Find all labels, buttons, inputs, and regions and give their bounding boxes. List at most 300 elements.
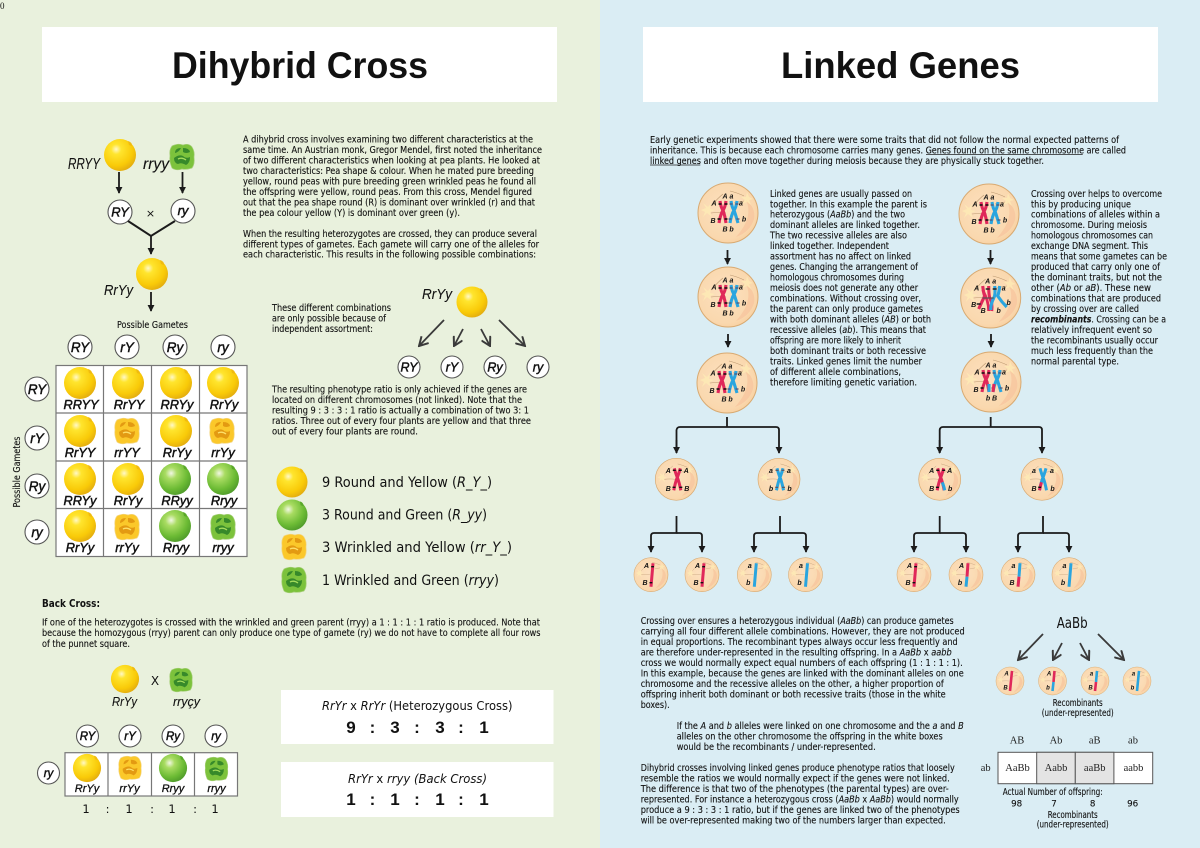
diagram: AaBb gamete production: a [1132, 672, 1136, 678]
diagram: RrYy gamete formation: RrYy [422, 286, 453, 303]
cells: gametes: B [693, 580, 699, 587]
test cross table: aaBb [1084, 763, 1105, 774]
text block: linked genes explanation: assortment has no affect on linked [770, 252, 911, 263]
text block: independent assortment note: are only possible because of [272, 314, 387, 324]
diagram: meiosis without crossing over: b [729, 310, 734, 318]
text block: phenotype ratio explanation: The resulting phenotype ratio is only achieved if the genes are [271, 384, 527, 396]
text block: crossing over explanation: by crossing over are called [1031, 304, 1139, 315]
callout: back cross ratio: 1 [390, 790, 400, 809]
cells: gametes: B [642, 580, 648, 587]
text block: linked genes explanation: dominant alleles are linked together. [770, 220, 920, 231]
text block: linked genes introduction: inheritance. This is because each chromosome carries many genes. Genes found on the same chromosome are called [650, 145, 1126, 156]
legend: phenotype ratio: 3 Wrinkled and Yellow (rr_Y_) [322, 540, 512, 556]
diagram: RrYy gamete formation: ry [533, 360, 544, 374]
text block: crossing over explanation: this by producing unique [1031, 199, 1131, 210]
diagram: meiosis with crossing over: A [973, 286, 979, 292]
text block: linked genes explanation: linked together. Independent [770, 241, 889, 252]
diagram: back cross parents: X [151, 674, 159, 688]
back cross punnett square: rY [124, 731, 137, 743]
diagram: meiosis without crossing over: B [721, 396, 727, 404]
diagram: meiosis without crossing over: a [738, 370, 742, 378]
diagram: meiosis without crossing over: A [720, 364, 727, 370]
diagram: meiosis with crossing over: b [986, 396, 991, 402]
cells: gametes: A [958, 563, 964, 570]
text block: phenotype ratio explanation: out of every four plants are round. [272, 426, 418, 438]
diagram: meiosis without crossing over: a [730, 278, 734, 284]
text block: back cross explanation: of the punnet square. [42, 639, 130, 650]
punnett square: RRyy [161, 493, 194, 508]
diagram: parental cross to F1: rryy [143, 156, 170, 173]
diagram: meiosis without crossing over: a [729, 364, 733, 370]
back cross punnett square: rrYy [119, 783, 141, 795]
back cross punnett square: Ry [166, 731, 181, 743]
text block: crossing over explanation: exchange DNA segment. This [1031, 241, 1148, 252]
text block: dihybrid introduction: out that the pea shape round (R) is dominant over wrinkled (r) and that [243, 197, 535, 208]
text block: dihybrid introduction: different types of gametes. Each gamete will carry one of the alleles for [243, 239, 539, 250]
cells: gametes: a [1063, 563, 1067, 570]
text block: linked genes explanation [769, 189, 931, 388]
title: Linked Genes: Linked Genes [781, 45, 1020, 86]
callout: heterozygous cross ratio: 3 [390, 718, 400, 737]
callout: heterozygous cross ratio: 3 [435, 718, 445, 737]
punnett square: RRYy [64, 493, 98, 508]
back cross punnett square: rryy [207, 783, 227, 795]
punnett square: RrYy [66, 540, 96, 555]
cells: gametes: A [906, 563, 912, 570]
callout: back cross ratio: : [458, 790, 464, 809]
text block: linked genes introduction: linked genes and often move together during meiosis because they are physically stuck together. [650, 156, 1044, 167]
gamete circles: top row: Ry [167, 340, 184, 355]
cells: gametes: A [643, 563, 649, 570]
test cross table: AB [1010, 736, 1024, 747]
text block: linked genes explanation: The two recessive alleles are also [769, 231, 907, 242]
text block: dihybrid introduction: same time. An Austrian monk, Gregor Mendel, first noted the inheritance [243, 145, 542, 156]
text block: allele arrangement note: alleles on the other chromosome the offspring in the white boxes [677, 732, 943, 742]
diagram: meiosis without crossing over: A [721, 194, 728, 200]
ratio under back cross square [82, 802, 219, 816]
cells: secondary division: b [769, 486, 774, 493]
title: Dihybrid Cross [42, 27, 557, 102]
diagram: back cross parents: rryçy [173, 694, 201, 709]
legend: phenotype ratio: 3 Round and Green (R_yy) [322, 508, 487, 524]
text block: linked genes explanation: combinations. Without crossing over, [770, 294, 921, 304]
diagram: meiosis without crossing over: b [741, 386, 746, 394]
diagram: AaBb gamete production: a [1090, 672, 1094, 678]
text block: linked genes explanation: therefore limiting genetic variation. [770, 377, 917, 388]
diagram: meiosis with crossing over [959, 184, 1021, 412]
cells: secondary division: B [929, 486, 934, 493]
cells: secondary division: A [928, 468, 934, 475]
cells: secondary division: A [946, 468, 952, 475]
diagram: parental cross to F1: × [146, 207, 155, 220]
title: Linked Genes [643, 27, 1158, 102]
text block: crossing over explanation: the recombinants usually occur [1031, 335, 1158, 346]
diagram: RrYy gamete formation: Ry [487, 360, 503, 374]
text block: back cross explanation: because the homozygous (rryy) parent can only produce one type of gamete (ry) we do not have to complete all four rows [42, 628, 541, 639]
punnett square: rrYy [211, 445, 236, 460]
text block: linked genes explanation: heterozygous (AaBb) and the two [770, 210, 905, 221]
ratio under back cross square: 1 [125, 802, 133, 816]
cells: gametes: b [746, 580, 751, 587]
text block: phenotype ratio explanation: ratios. Three out of every four plants are yellow and that three [272, 416, 531, 427]
diagram: meiosis without crossing over: B [710, 302, 716, 309]
punnett square: RRYy [161, 397, 195, 412]
text block: crossing over explanation: produced that carry only one of [1031, 262, 1161, 273]
cells: gametes: a [748, 563, 752, 570]
text block: independent assortment note: These different combinations [271, 303, 391, 314]
cells: secondary division: B [666, 486, 671, 493]
callout: back cross ratio: : [370, 790, 375, 809]
text block: phenotype ratio explanation [271, 384, 531, 438]
diagram: RrYy gamete formation: rY [446, 360, 460, 374]
text block: crossing over explanation: means that some gametes can be [1031, 252, 1167, 263]
punnett square: RrYY [114, 397, 146, 412]
diagram: back cross parents [111, 665, 201, 709]
panel: dihybrid cross background [0, 0, 600, 848]
text block: linked genes introduction [650, 135, 1126, 167]
cells: gametes: a [1012, 563, 1016, 570]
back cross punnett square: ry [44, 768, 55, 780]
ratio under back cross square: : [106, 802, 109, 816]
text block: crossing over explanation: chromosome. During meiosis [1031, 220, 1147, 231]
text block: linked genes explanation: homologous chromosomes during [770, 273, 904, 284]
text block: dihybrid introduction: When the resulting heterozygotes are crossed, they can produce several [243, 229, 537, 240]
cells: secondary division: a [787, 468, 791, 475]
label: recombinants under-represented upper [1042, 698, 1114, 719]
text block: crossing over explanation: homologous chromosomes can [1031, 231, 1153, 242]
diagram: meiosis without crossing over: B [722, 226, 728, 234]
diagram: meiosis with crossing over: b [990, 228, 995, 234]
text block: crossing over proportions: chromosome and the recessive alleles on the other, a higher proportion of [641, 679, 944, 690]
callout: back cross ratio: : [414, 790, 420, 809]
diagram: AaBb gamete production: b [1046, 686, 1050, 692]
test cross table: Ab [1050, 736, 1062, 747]
ratio under back cross square: : [193, 802, 197, 816]
heading: Possible Gametes top: Possible Gametes [117, 320, 188, 331]
diagram: parental cross to F1: RrYy [104, 282, 134, 299]
text block: linked dihybrid ratios: represented. For instance a heterozygous cross (AaBb x AaBb) would normally [641, 794, 959, 806]
diagram: meiosis with crossing over: a [1000, 202, 1004, 208]
label: actual number of offspring: Actual Number of offspring: [1003, 787, 1103, 798]
text block: linked dihybrid ratios: The difference is that two of the phenotypes (the parental types) are over- [640, 784, 949, 795]
punnett square: RrYY [65, 445, 97, 460]
diagram: parental cross to F1: ry [178, 203, 190, 218]
gamete circles: left column [25, 377, 49, 544]
diagram: meiosis without crossing over: a [730, 194, 734, 200]
text block: linked genes explanation: of different allele combinations, [770, 367, 901, 378]
cells: secondary division: a [1050, 468, 1054, 475]
text block: linked dihybrid ratios: resemble the ratios we would normally expect if the genes were not linked. [641, 774, 950, 784]
callout: back cross ratio: RrYr x rryy (Back Cross) [348, 771, 487, 786]
gamete circles: top row: rY [120, 340, 135, 355]
cells: secondary division: B [1031, 486, 1037, 493]
text block: dihybrid introduction: the pea colour yellow (Y) is dominant over green (y). [243, 208, 460, 219]
text block: crossing over proportions: In this example, because the genes are linked with the dominant alleles on one [641, 668, 964, 679]
punnett square: RRYY [63, 397, 100, 412]
text block: linked dihybrid ratios: Dihybrid crosses involving linked genes produce phenotype ratios that loosely [641, 763, 955, 774]
label: actual number of offspring: 8 [1090, 800, 1095, 810]
back cross punnett square: RY [80, 731, 97, 743]
cells: gametes: B [1009, 580, 1015, 587]
diagram: meiosis with crossing over: b [1007, 300, 1012, 307]
diagram: meiosis with crossing over: A [982, 194, 989, 202]
callout: heterozygous cross ratio: : [414, 718, 420, 737]
diagram: meiosis with crossing over: A [971, 202, 978, 208]
label: recombinants under-represented lower: Recombinants [1048, 810, 1098, 821]
ratio under back cross square: 1 [211, 802, 219, 816]
text block: linked genes explanation: both dominant traits or both recessive [770, 346, 926, 357]
cells: secondary division: B [684, 486, 689, 493]
diagram: meiosis with crossing over: B [973, 387, 979, 394]
diagram: meiosis without crossing over: A [721, 278, 728, 284]
text block: crossing over explanation: recombinants. Crossing can be a [1031, 314, 1166, 325]
text block: crossing over proportions: in equal proportions. The recombinant types always occur less frequently and [641, 637, 958, 648]
diagram: AaBb gamete production: B [1003, 686, 1008, 692]
diagram: parental cross to F1 [68, 139, 195, 311]
cells: gametes: b [1061, 580, 1066, 587]
heading: Back Cross: Back Cross: [42, 598, 100, 610]
back cross punnett square: ry [211, 731, 222, 743]
diagram: meiosis without crossing over: B [710, 218, 716, 225]
diagram: meiosis without crossing over: A [710, 284, 717, 292]
cells: secondary division: A [683, 468, 689, 475]
text block: dihybrid introduction: each characteristic. This results in the following possible combinations: [243, 250, 536, 261]
cells: secondary division: a [769, 468, 773, 475]
diagram: AaBb gamete production: AaBb [1057, 614, 1088, 632]
diagram: meiosis without crossing over: A [709, 370, 716, 378]
label: actual number of offspring: 7 [1051, 800, 1057, 810]
cells: gametes: b [797, 580, 802, 587]
text block: crossing over explanation: Crossing over helps to overcome [1031, 189, 1162, 200]
arrows: first division tree left [676, 417, 779, 453]
text block: linked genes explanation: genes. Changing the arrangement of [770, 262, 919, 273]
text block: back cross explanation [42, 618, 541, 650]
page marker: 0 [0, 1, 5, 11]
test cross table: Aabb [1045, 763, 1067, 774]
text block: crossing over proportions: boxes). [641, 700, 670, 711]
diagram: parental cross to F1: RRYY [68, 156, 101, 173]
gamete circles: left column: rY [30, 431, 45, 446]
text block: phenotype ratio explanation: resulting 9 : 3 : 3 : 1 ratio is actually a combination of two 3: 1 [272, 406, 529, 416]
text block: crossing over explanation: combinations of alleles within a [1031, 210, 1160, 221]
arrows: second division trees [651, 516, 1069, 552]
text block: linked genes explanation: together. In this example the parent is [770, 199, 927, 210]
callout: heterozygous cross ratio: : [458, 718, 464, 737]
ratio under back cross square: 1 [168, 802, 176, 816]
diagram: meiosis without crossing over: a [739, 284, 743, 292]
cells: gametes: b [958, 580, 963, 587]
diagram: meiosis without crossing over [697, 183, 758, 413]
gamete circles: left column: ry [31, 525, 44, 540]
diagram: AaBb gamete production: B [1088, 686, 1093, 692]
punnett square [56, 366, 247, 556]
diagram: parental cross to F1: RY [111, 204, 130, 220]
text block: independent assortment note [271, 303, 391, 335]
text block: dihybrid introduction: two characteristics: Pea shape & colour. When he mated pure breeding [243, 166, 534, 177]
text block: crossing over explanation: other (Ab or aB). These new [1031, 283, 1151, 294]
diagram: meiosis without crossing over: B [709, 388, 715, 395]
punnett square: rrYy [115, 540, 140, 555]
callout: back cross ratio: 1 [479, 790, 489, 809]
arrows: first division tree left head [676, 440, 678, 453]
diagram: meiosis without crossing over: a [739, 200, 743, 208]
text block: crossing over explanation: relatively infrequent event so [1031, 325, 1152, 336]
text block: allele arrangement note: would be the recombinants / under-represented. [677, 742, 876, 753]
text block: allele arrangement note [677, 721, 964, 753]
diagram: meiosis without crossing over: b [728, 396, 733, 404]
back cross punnett square: RrYy [75, 783, 101, 795]
text block: linked genes explanation: meiosis does not generate any other [770, 283, 918, 294]
ratio under back cross square: : [150, 802, 154, 816]
gamete circles: left column: RY [28, 382, 47, 397]
diagram: meiosis with crossing over: B [971, 219, 977, 226]
text block: linked dihybrid ratios [640, 763, 960, 826]
diagram: meiosis with crossing over: a [993, 362, 997, 370]
punnett square: Rryy [211, 493, 239, 508]
cells: gametes [634, 558, 1086, 592]
cells: gametes: B [905, 580, 911, 587]
diagram: meiosis with crossing over: B [971, 302, 976, 309]
diagram: meiosis with crossing over: B [992, 396, 997, 402]
ratio under back cross square: 1 [82, 802, 90, 816]
back cross punnett square [38, 725, 238, 796]
diagram: AaBb gamete production: A [1046, 672, 1051, 678]
cells: secondary division [655, 458, 1063, 500]
text block: crossing over proportions: cross we would normally expect equal numbers of each offspring (1 : 1 : 1 : 1). [641, 658, 963, 669]
diagram: AaBb gamete production [996, 614, 1151, 695]
text block: back cross explanation: If one of the heterozygotes is crossed with the wrinkled and green parent (rryy) a 1 : 1 : 1 : 1 ratio is produced. Note that [42, 618, 540, 628]
back cross punnett square: Rryy [162, 783, 186, 795]
legend: phenotype ratio [276, 466, 512, 593]
label: actual number of offspring: 96 [1127, 800, 1138, 810]
diagram: meiosis without crossing over: B [722, 310, 728, 318]
callout: back cross ratio: 1 [435, 790, 445, 809]
callout: back cross ratio: 1 [346, 790, 356, 809]
cells: secondary division: b [1050, 486, 1055, 493]
text block: linked genes explanation: recessive alleles (ab). This means that [770, 325, 926, 336]
gamete circles: top row [68, 335, 235, 359]
callout: heterozygous cross ratio: 1 [479, 718, 489, 737]
diagram: meiosis without crossing over: b [742, 300, 747, 308]
callout: heterozygous cross ratio: : [370, 718, 375, 737]
test cross table: AaBb [1005, 763, 1030, 774]
text block: linked genes explanation: the parent can only produce gametes [770, 304, 923, 315]
diagram: meiosis without crossing over: A [710, 200, 717, 208]
cells: secondary division: a [1032, 468, 1036, 475]
gamete circles: top row: RY [71, 340, 90, 355]
text block: linked genes introduction: Early genetic experiments showed that there were some traits that did not follow the normal expected patterns of [650, 135, 1120, 146]
text block: linked dihybrid ratios: will be over-represented making two of the numbers larger than expected. [641, 816, 946, 826]
text block: linked genes explanation: Linked genes are usually passed on [770, 189, 912, 200]
callout: back cross ratio [281, 762, 554, 817]
text block: phenotype ratio explanation: located on different chromosomes (not linked). Note that the [272, 395, 522, 406]
label: actual number of offspring: 98 [1011, 800, 1022, 810]
test cross table: aabb [1124, 763, 1143, 774]
cells: secondary division: b [948, 486, 953, 493]
diagram: meiosis without crossing over: b [742, 216, 747, 224]
callout: heterozygous cross ratio [281, 690, 554, 744]
diagram: AaBb gamete production: b [1131, 686, 1135, 692]
text block: linked genes explanation: with both dominant alleles (AB) or both [770, 314, 931, 325]
diagram: RrYy gamete formation: RY [401, 360, 419, 374]
panel: linked genes background [600, 0, 1200, 848]
legend: phenotype ratio: 9 Round and Yellow (R_Y_) [322, 475, 492, 491]
label: recombinants under-represented upper: (under-represented) [1042, 708, 1114, 719]
diagram: meiosis with crossing over: A [984, 362, 991, 370]
text block: crossing over proportions: carrying all four different allele combinations. However, they are not produced [641, 626, 965, 637]
test cross table: aB [1089, 736, 1101, 747]
diagram: meiosis with crossing over: b [1005, 386, 1010, 392]
test cross table: ab [981, 763, 991, 774]
text block: crossing over proportions: are therefore under-represented in the resulting offspring. In a AaBb x aabb [641, 647, 952, 658]
diagram: back cross parents: RrYy [112, 694, 138, 709]
text block: dihybrid introduction: the offspring were yellow, round peas. From this cross, Mendel figured [243, 187, 532, 198]
diagram: meiosis with crossing over: b [997, 308, 1002, 315]
diagram: meiosis with crossing over: B [983, 228, 989, 234]
text block: crossing over proportions [641, 616, 965, 711]
heading: Possible Gametes side: Possible Gametes [12, 436, 23, 508]
arrows: first division tree right head [939, 440, 941, 453]
text block: crossing over proportions: Crossing over ensures a heterozygous individual (AaBb) can produce gametes [641, 616, 954, 627]
cells: gametes: A [694, 563, 700, 570]
text block: allele arrangement note: If the A and b alleles were linked on one chromosome and the a and B [677, 721, 964, 732]
gamete circles: left column: Ry [29, 479, 46, 494]
diagram: RrYy gamete formation [398, 286, 549, 378]
gamete circles: top row: ry [217, 340, 230, 355]
diagram: meiosis with crossing over: b [1003, 218, 1008, 224]
title: Dihybrid Cross: Dihybrid Cross [172, 45, 428, 86]
text block: crossing over explanation [1031, 189, 1167, 367]
text block: crossing over explanation: the dominant traits, but not the [1031, 273, 1162, 284]
callout: heterozygous cross ratio: RrYr x RrYr (Heterozygous Cross) [322, 698, 512, 713]
diagram: meiosis with crossing over: A [984, 278, 990, 286]
cells: secondary division: A [665, 468, 671, 475]
diagram: meiosis without crossing over: b [729, 226, 734, 234]
punnett square: RrYy [163, 445, 193, 460]
text block: crossing over proportions: offspring inherit both dominant or both recessive traits (those in the white [641, 689, 946, 700]
text block: linked dihybrid ratios: produce a 9 : 3 : 3 : 1 ratio, but if the genes are linked two of the phenotypes [641, 805, 960, 816]
punnett square: rrYY [114, 445, 141, 460]
test cross table: ab [1128, 736, 1138, 747]
diagram: meiosis with crossing over: a [1002, 370, 1006, 376]
text block: independent assortment note: independent assortment: [272, 324, 373, 335]
diagram: meiosis with crossing over: A [973, 370, 980, 376]
cells: secondary division: b [787, 486, 792, 493]
diagram: meiosis with crossing over: a [991, 194, 995, 202]
punnett square: Rryy [163, 540, 191, 555]
diagram: meiosis with crossing over: a [1002, 286, 1006, 292]
text block: dihybrid introduction: A dihybrid cross involves examining two different characteristics at the [243, 134, 533, 146]
arrows: first division tree right [940, 417, 1042, 453]
text block: dihybrid introduction: yellow, round peas with pure breeding green wrinkled peas he found all [243, 176, 536, 187]
punnett square: rryy [212, 540, 235, 555]
text block: crossing over explanation: much less frequently than the [1031, 346, 1153, 357]
text block: crossing over explanation: combinations that are produced [1031, 294, 1161, 304]
text block: linked genes explanation: offspring are more likely to inherit [770, 335, 901, 346]
punnett square: RrYy [114, 493, 144, 508]
text block: linked genes explanation: traits. Linked genes limit the number [770, 356, 922, 367]
diagram: meiosis with crossing over: B [981, 308, 986, 315]
diagram: AaBb gamete production: A [1003, 672, 1009, 678]
text block: crossing over explanation: normal parental type. [1031, 356, 1119, 367]
cells: gametes: a [799, 563, 803, 570]
label: recombinants under-represented upper: Recombinants [1053, 698, 1103, 709]
test cross table [981, 736, 1153, 784]
callout: heterozygous cross ratio: 9 [346, 718, 356, 737]
text block: dihybrid introduction [243, 134, 542, 261]
text block: dihybrid introduction: of two different characteristics when looking at pea plants. He looked at [243, 156, 540, 166]
label: actual number of offspring [1003, 787, 1138, 810]
